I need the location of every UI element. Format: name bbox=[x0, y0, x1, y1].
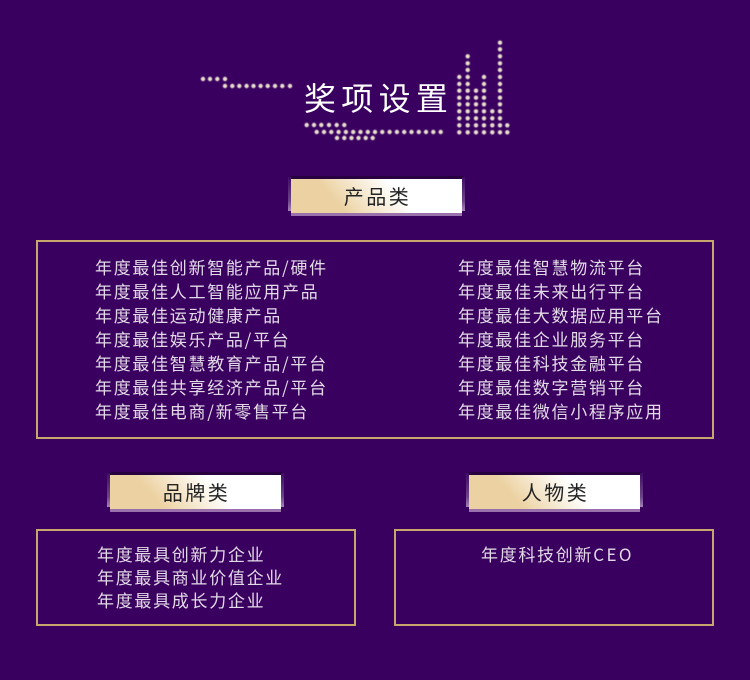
list: brand awards bbox=[97, 541, 284, 612]
decorative dot pattern with bar chart motif bbox=[200, 40, 510, 141]
panel: 品牌类 bbox=[36, 529, 356, 626]
tag: 产品类: 产品类 bbox=[344, 181, 411, 210]
list: brand awards: 年度最具成长力企业 bbox=[97, 587, 265, 612]
list: left awards: 年度最佳运动健康产品 bbox=[95, 302, 282, 327]
list: right awards: 年度最佳大数据应用平台 bbox=[458, 302, 664, 327]
list: right awards: 年度最佳智慧物流平台 bbox=[458, 254, 645, 279]
tag: 人物类: 人物类 bbox=[522, 477, 589, 506]
tag: 人物类 bbox=[466, 472, 643, 512]
tag: 产品类 bbox=[288, 176, 465, 216]
tag: 品牌类: 品牌类 bbox=[163, 477, 230, 506]
panel: 人物类 bbox=[394, 529, 714, 626]
list: left awards: 年度最佳娱乐产品/平台 bbox=[95, 326, 290, 351]
list: brand awards: 年度最具商业价值企业 bbox=[97, 564, 284, 589]
panel: 产品类 bbox=[36, 240, 714, 439]
list: left awards: 年度最佳智慧教育产品/平台 bbox=[95, 350, 328, 375]
list: left awards: 年度最佳人工智能应用产品 bbox=[95, 278, 319, 303]
list: left awards: 年度最佳电商/新零售平台 bbox=[95, 398, 309, 423]
list: right awards bbox=[458, 254, 664, 423]
list: right awards: 年度最佳未来出行平台 bbox=[458, 278, 645, 303]
list: right awards: 年度最佳科技金融平台 bbox=[458, 350, 645, 375]
list: right awards: 年度最佳数字营销平台 bbox=[458, 374, 645, 399]
list: right awards: 年度最佳企业服务平台 bbox=[458, 326, 645, 351]
list: left awards bbox=[95, 254, 328, 423]
list: left awards: 年度最佳共享经济产品/平台 bbox=[95, 374, 328, 399]
list: right awards: 年度最佳微信小程序应用 bbox=[458, 398, 664, 423]
title: 奖项设置 bbox=[304, 74, 453, 120]
list: person award: 年度科技创新CEO bbox=[481, 541, 634, 566]
list: left awards: 年度最佳创新智能产品/硬件 bbox=[95, 254, 328, 279]
tag: 品牌类 bbox=[107, 472, 284, 512]
list: brand awards: 年度最具创新力企业 bbox=[97, 541, 265, 566]
